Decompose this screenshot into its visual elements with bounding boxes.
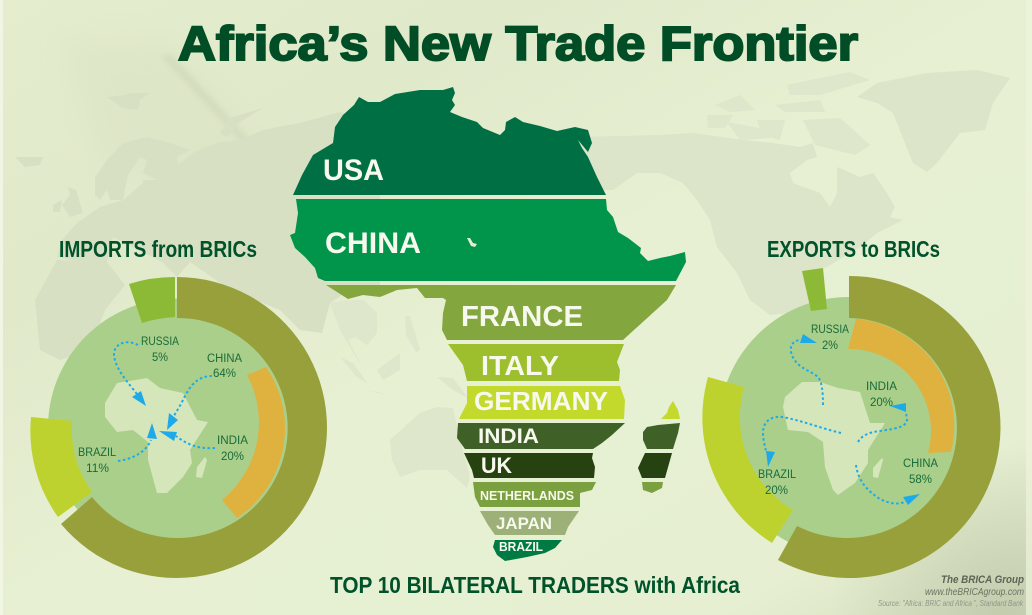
icon: small Africa — [105, 378, 208, 493]
band: China — [290, 199, 686, 281]
label: Russia: 2% — [822, 340, 838, 352]
band: Netherlands — [473, 482, 596, 507]
label: India: 20% — [221, 451, 244, 463]
title: Africa’s New Trade Frontier — [178, 18, 858, 71]
heading: bottom caption: TOP 10 BILATERAL TRADERS with Africa — [330, 572, 741, 598]
segment: India 20% — [848, 319, 954, 453]
label: China — [903, 458, 938, 486]
credit block: The BRICA Group — [941, 574, 1024, 586]
arrow: Brazil — [118, 423, 157, 461]
label: China: 64% — [213, 368, 236, 380]
heading: imports: IMPORTS from BRICs — [59, 236, 257, 262]
band: USA — [293, 87, 606, 195]
band: France — [326, 285, 676, 340]
credit block — [878, 574, 1024, 608]
band: Netherlands: NETHERLANDS — [480, 488, 574, 503]
band: Japan: JAPAN — [496, 514, 552, 533]
segment: India 20% — [222, 367, 285, 518]
band: India — [457, 423, 625, 449]
arrow: Brazil — [763, 417, 841, 467]
band: Japan — [480, 511, 579, 535]
arrow: China — [167, 376, 212, 430]
band: Brazil: BRAZIL — [499, 540, 543, 554]
label: Russia: RUSSIA — [141, 336, 179, 348]
arrow: Russia — [791, 334, 823, 405]
Madagascar bands — [638, 401, 680, 493]
chart: imports base circle — [48, 298, 306, 556]
segment: Russia 2% — [802, 268, 827, 311]
label: China: CHINA — [207, 353, 242, 365]
label: Brazil — [758, 469, 797, 497]
label: India: INDIA — [866, 381, 897, 393]
label: China: CHINA — [903, 458, 938, 470]
label: China: 58% — [909, 474, 932, 486]
label: Brazil — [78, 447, 117, 475]
label: Russia: 5% — [152, 352, 168, 364]
label: Russia: RUSSIA — [811, 324, 849, 336]
band: Italy: ITALY — [481, 350, 559, 381]
heading: exports: EXPORTS to BRICs — [767, 236, 940, 262]
panel: imports from BRICs — [30, 236, 327, 578]
segment: China 58% — [778, 276, 1000, 578]
label: Brazil: BRAZIL — [758, 469, 797, 481]
segment: Brazil 20% — [702, 377, 793, 543]
label: India — [866, 381, 897, 409]
label: China — [207, 353, 242, 380]
band: China: CHINA — [325, 227, 421, 260]
label: India — [217, 435, 248, 463]
band: Brazil — [493, 540, 562, 561]
label: Russia — [141, 336, 179, 364]
arrow: India — [159, 431, 215, 448]
panel: exports to BRICs — [702, 236, 1000, 578]
label: Brazil: 20% — [765, 485, 788, 497]
band: USA: USA — [323, 154, 384, 187]
band: France: FRANCE — [461, 301, 583, 333]
band: Germany: GERMANY — [474, 386, 608, 416]
segment: Russia 5% — [129, 277, 175, 323]
segment: Brazil 11% — [30, 417, 92, 517]
segment: China 64% — [61, 277, 327, 578]
map: Africa by top 10 trading partners — [290, 87, 686, 561]
world map backdrop — [15, 70, 1010, 488]
arrow: India — [858, 403, 907, 442]
band: Italy — [448, 344, 624, 381]
icon: small Africa — [783, 382, 885, 495]
label: Brazil: 11% — [86, 463, 109, 475]
label: Brazil: BRAZIL — [78, 447, 117, 459]
band: India: INDIA — [478, 425, 539, 448]
label: India: 20% — [870, 397, 893, 409]
band: UK: UK — [481, 453, 512, 478]
label: Russia — [811, 324, 849, 352]
arrow: Russia — [114, 342, 146, 406]
band: UK — [464, 453, 595, 478]
arrow: China — [856, 465, 920, 505]
label: India: INDIA — [217, 435, 248, 447]
chart: exports base circle — [719, 297, 979, 557]
